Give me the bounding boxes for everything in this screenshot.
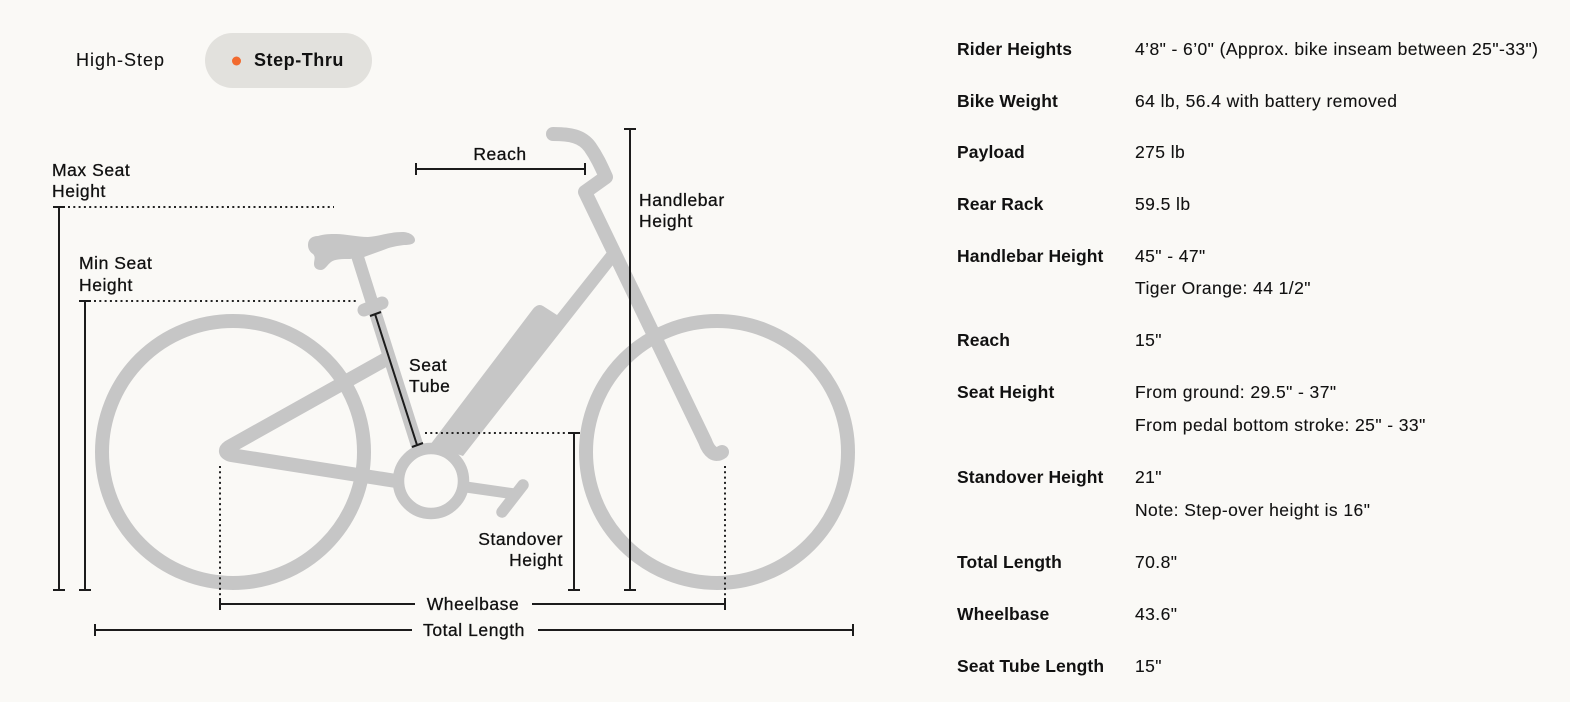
- down tube and battery: [430, 252, 613, 456]
- seat tube and post: [358, 258, 417, 445]
- dimension: wheelbase: Wheelbase: [427, 594, 519, 614]
- toggle option: Step-Thru selected: [205, 33, 372, 88]
- front wheel: [586, 321, 848, 583]
- spec: seat height: From ground: 29.5" - 37": [1135, 382, 1336, 402]
- rear triangle: [226, 358, 396, 481]
- spec: standover height: Note: Step-over height is 16": [1135, 500, 1370, 520]
- spec: rider heights: Rider Heights: [957, 39, 1072, 59]
- spec: standover height: [957, 467, 1370, 520]
- spec: bike weight: [957, 91, 1397, 111]
- spec: seat height: Seat Height: [957, 382, 1054, 402]
- crank arm: [466, 487, 515, 494]
- saddle: [308, 232, 415, 270]
- specification table: [957, 39, 1538, 676]
- spec: handlebar height: 45" - 47": [1135, 246, 1206, 266]
- spec: seat tube length: 15": [1135, 656, 1162, 676]
- spec: reach: 15": [1135, 330, 1162, 350]
- seat clamp: [364, 303, 382, 310]
- spec: seat height: From pedal bottom stroke: 25" - 33": [1135, 415, 1426, 435]
- spec: total length: 70.8": [1135, 552, 1177, 572]
- spec: handlebar height: Handlebar Height: [957, 246, 1104, 266]
- dimension: max seat height: Max Seat: [52, 160, 130, 180]
- spec: total length: [957, 552, 1177, 572]
- spec: rear rack: Rear Rack: [957, 194, 1044, 214]
- spec: payload: [957, 142, 1185, 162]
- spec: reach: Reach: [957, 330, 1010, 350]
- dimension: seat tube: [370, 312, 450, 447]
- spec: handlebar height: [957, 246, 1311, 298]
- spec: rider heights: 4’8" - 6’0" (Approx. bike inseam between 25"-33"): [1135, 39, 1538, 59]
- spec: seat height: [957, 382, 1426, 435]
- fork, stem and handlebar: [553, 134, 722, 454]
- spec: bike weight: Bike Weight: [957, 91, 1058, 111]
- toggle: frame style: [76, 33, 372, 88]
- dimension: seat tube: Tube: [409, 376, 450, 396]
- toggle option: High-Step: High-Step: [76, 50, 165, 70]
- spec: rear rack: 59.5 lb: [1135, 194, 1190, 214]
- spec: reach: [957, 330, 1162, 350]
- dimension: handlebar height: [624, 129, 725, 590]
- dimension: reach: Reach: [473, 144, 527, 164]
- toggle option: Step-Thru selected: Step-Thru: [254, 50, 344, 70]
- spec: standover height: Standover Height: [957, 467, 1104, 487]
- bike diagram: [52, 129, 853, 640]
- dimension: handlebar height: Height: [639, 211, 693, 231]
- dimension: total length: Total Length: [423, 620, 525, 640]
- chainring: [398, 448, 464, 514]
- spec: seat tube length: Seat Tube Length: [957, 656, 1104, 676]
- dimension: seat tube: Seat: [409, 355, 447, 375]
- dimension: total length: [95, 620, 853, 640]
- spec: rider heights: [957, 39, 1538, 59]
- spec: wheelbase: Wheelbase: [957, 604, 1049, 624]
- spec: handlebar height: Tiger Orange: 44 1/2": [1135, 278, 1311, 298]
- spec: rear rack: [957, 194, 1190, 214]
- spec: standover height: 21": [1135, 467, 1162, 487]
- spec: bike weight: 64 lb, 56.4 with battery removed: [1135, 91, 1397, 111]
- spec: payload: 275 lb: [1135, 142, 1185, 162]
- dimension: min seat height: [79, 253, 357, 590]
- spec: total length: Total Length: [957, 552, 1062, 572]
- dimension: handlebar height: Handlebar: [639, 190, 725, 210]
- spec: wheelbase: 43.6": [1135, 604, 1177, 624]
- dimension: standover height: [425, 433, 580, 590]
- dimension: reach: [416, 144, 585, 175]
- dimension: standover height: Standover: [478, 529, 563, 549]
- rear wheel: [102, 321, 364, 583]
- dimension: wheelbase: [220, 466, 725, 614]
- pedal: [502, 485, 523, 512]
- bike silhouette: [102, 134, 848, 583]
- dimension: max seat height: [52, 160, 334, 590]
- dimension: min seat height: Min Seat: [79, 253, 152, 273]
- dimension: standover height: Height: [509, 550, 563, 570]
- spec: payload: Payload: [957, 142, 1025, 162]
- dimension: max seat height: Height: [52, 181, 106, 201]
- spec: wheelbase: [957, 604, 1177, 624]
- dimension: min seat height: Height: [79, 275, 133, 295]
